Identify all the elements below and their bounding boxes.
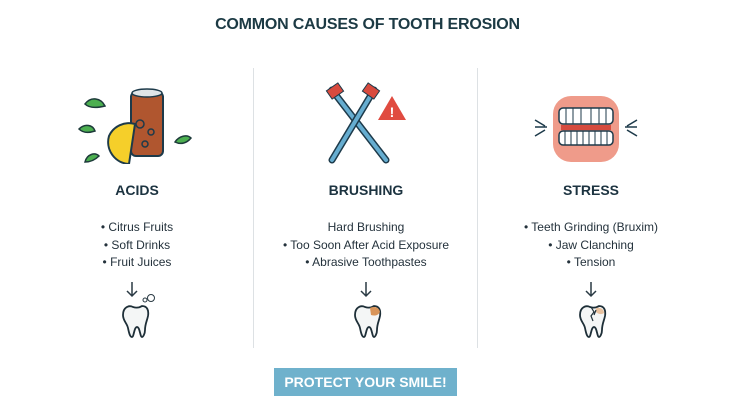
heading: brushing: BRUSHING [329, 182, 403, 198]
list: acids [101, 220, 173, 269]
list: stress: • Teeth Grinding (Bruxim) [524, 220, 658, 234]
icon: arrow and stained tooth [354, 282, 382, 338]
icon: arrow and cracked tooth [579, 282, 606, 338]
list: acids: • Soft Drinks [104, 238, 170, 252]
button: protect your smile [274, 368, 457, 396]
list: stress: • Jaw Clanching [548, 238, 634, 252]
panel: acids [78, 88, 192, 338]
icon: crossed toothbrushes with warning: ! [390, 104, 394, 120]
heading: acids: ACIDS [115, 182, 159, 198]
list: brushing [283, 220, 449, 269]
panel: brushing [283, 82, 449, 338]
title: COMMON CAUSES OF TOOTH EROSION [215, 16, 520, 33]
icon: crossed toothbrushes with warning [326, 82, 406, 164]
list: brushing: • Abrasive Toothpastes [305, 255, 427, 269]
list: acids: • Citrus Fruits [101, 220, 173, 234]
icon: clenched teeth [534, 96, 638, 162]
list: brushing: • Too Soon After Acid Exposure [283, 238, 449, 252]
list: brushing: Hard Brushing [328, 220, 404, 234]
list: acids: • Fruit Juices [103, 255, 171, 269]
list: stress [524, 220, 658, 269]
button: protect your smile: PROTECT YOUR SMILE! [284, 374, 447, 390]
icon: arrow and eroded tooth [122, 282, 155, 338]
icon: lemon and soda can [78, 88, 192, 164]
list: stress: • Tension [567, 255, 615, 269]
panel: stress [524, 96, 658, 338]
heading: stress: STRESS [563, 182, 619, 198]
